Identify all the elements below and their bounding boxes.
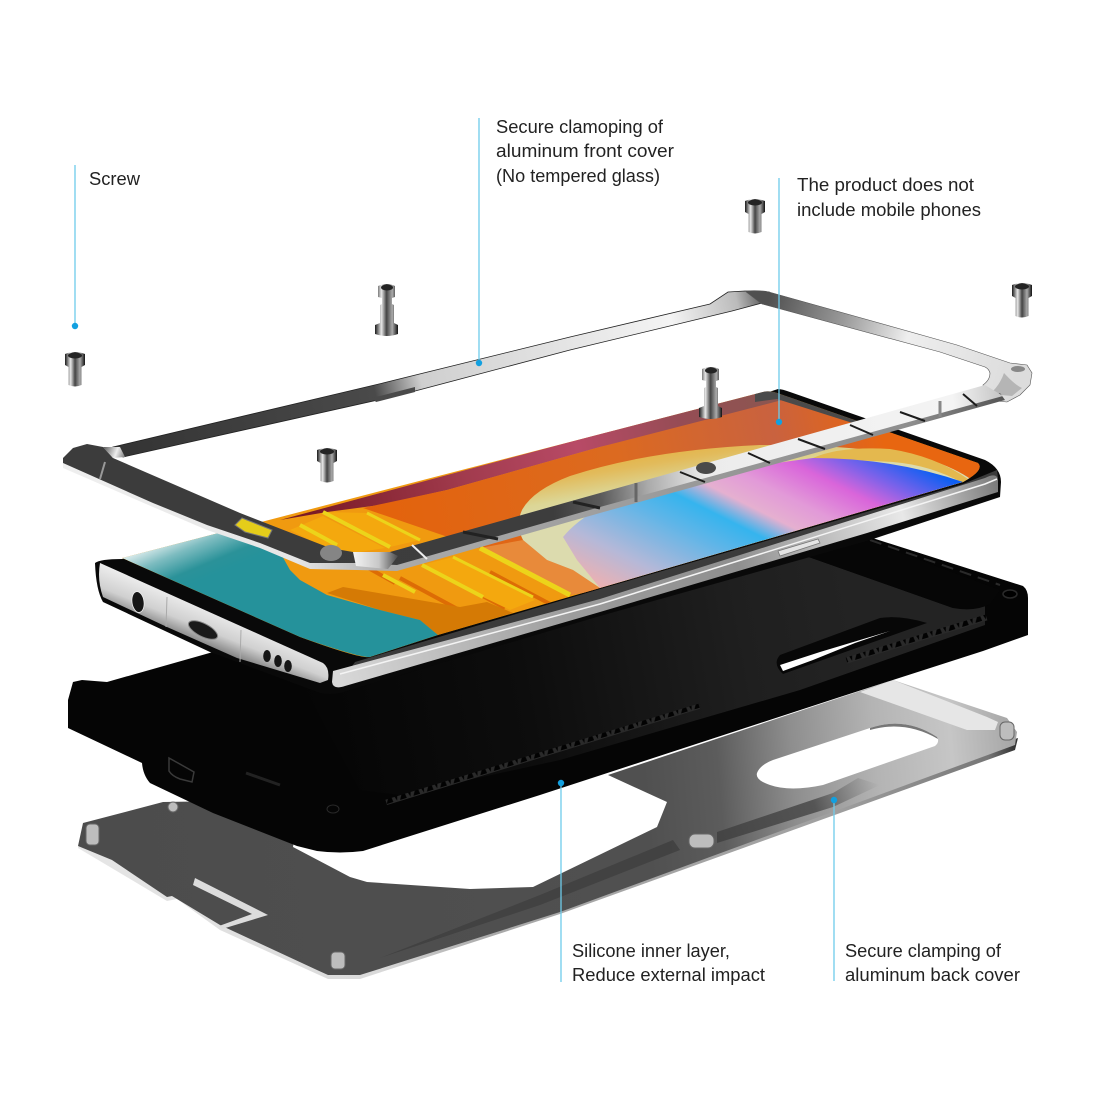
screw 3 bbox=[745, 199, 765, 234]
case outer body bbox=[68, 535, 1028, 852]
frame corner screw bbox=[320, 545, 342, 561]
back cover plate bbox=[78, 680, 1017, 975]
peach area bbox=[480, 540, 600, 595]
long screw 2 bbox=[699, 367, 722, 419]
screw 2 bbox=[317, 448, 337, 482]
right corner shading bbox=[990, 373, 1022, 396]
corner screw hole bbox=[327, 805, 339, 813]
callout: no phone included bbox=[776, 175, 981, 425]
phone screen bbox=[122, 391, 980, 658]
screen brown orange field bbox=[363, 398, 985, 595]
bright corner of back cover bbox=[860, 680, 998, 730]
screen top bezel bbox=[755, 391, 857, 422]
back cover recess highlight bbox=[193, 878, 268, 929]
case inner face bbox=[300, 555, 985, 795]
frame camera cutout bbox=[235, 518, 272, 538]
screen iridescent panel bbox=[563, 458, 963, 588]
aluminum front cover frame bbox=[63, 291, 1032, 571]
amber blocks bbox=[290, 512, 535, 610]
silver bend bbox=[353, 552, 398, 569]
screen yellow stripes bbox=[300, 512, 570, 597]
slot light sliver bbox=[780, 631, 890, 671]
screen cream swirl bbox=[519, 445, 972, 588]
corner shine bbox=[103, 447, 125, 458]
frame bottom bar strip bbox=[63, 393, 1005, 571]
gold band right bbox=[813, 448, 968, 483]
frame mid hole bbox=[696, 462, 716, 474]
callout: no phone included: The product does not bbox=[797, 175, 974, 195]
rail highlight bbox=[340, 479, 997, 674]
callout: back cover: Secure clamping of bbox=[845, 941, 1002, 961]
frame notches bbox=[100, 394, 977, 559]
frame corner screw right bbox=[1011, 366, 1025, 372]
mobile phone bbox=[95, 380, 1010, 694]
callout: front cover: aluminum front cover bbox=[496, 141, 674, 161]
frame side button bbox=[372, 387, 415, 402]
back cover lower recess right bbox=[717, 778, 880, 843]
callout: screw bbox=[72, 165, 141, 329]
callout: front cover bbox=[476, 117, 674, 366]
callout: no phone included: include mobile phones bbox=[797, 200, 981, 220]
cutout rim bbox=[870, 724, 938, 739]
soft top edge bbox=[280, 394, 745, 514]
callout: back cover: aluminum back cover bbox=[845, 965, 1020, 985]
phone side rail bbox=[332, 475, 998, 687]
case ribs bbox=[387, 619, 987, 805]
screw 4 bbox=[1012, 283, 1032, 318]
screw 1 bbox=[65, 352, 85, 386]
screen orange base bbox=[122, 391, 980, 658]
phone volume button bbox=[778, 539, 820, 556]
callout: silicone layer: Silicone inner layer, bbox=[572, 941, 730, 961]
darker inner shelf bbox=[803, 539, 1000, 609]
chin ports bbox=[131, 591, 292, 672]
back cover side edge bbox=[78, 738, 1018, 979]
back cover posts bbox=[86, 722, 1014, 969]
USB port bbox=[169, 758, 194, 782]
corner screw hole right bbox=[1003, 590, 1017, 598]
screen teal area bbox=[122, 520, 438, 657]
aluminum back cover bbox=[78, 680, 1018, 979]
callout: silicone layer bbox=[558, 780, 765, 985]
darker orange stripes bbox=[368, 570, 551, 610]
callout: front cover: Secure clamoping of bbox=[496, 117, 664, 137]
frame bottom bar face bbox=[63, 385, 1003, 565]
long screw 1 bbox=[375, 284, 398, 336]
frame right bar bbox=[745, 291, 1032, 402]
top edge vents bbox=[870, 540, 1000, 585]
speaker slot bbox=[246, 773, 280, 785]
callout: silicone layer: Reduce external impact bbox=[572, 965, 765, 985]
phone screen bezel bbox=[345, 470, 998, 676]
screen top band bbox=[280, 390, 800, 520]
back cover lower recess left bbox=[380, 840, 680, 958]
callout: front cover: (No tempered glass) bbox=[496, 166, 660, 186]
callout: screw: Screw bbox=[89, 169, 141, 189]
slot opening bbox=[777, 617, 927, 674]
phone shadowed body bbox=[95, 389, 1001, 694]
callout: back cover bbox=[831, 797, 1020, 985]
black silicone inner layer bbox=[68, 535, 1028, 852]
phone bottom chin bbox=[99, 563, 328, 683]
frame top bar bbox=[113, 291, 769, 457]
dark orange lower block bbox=[327, 587, 513, 635]
